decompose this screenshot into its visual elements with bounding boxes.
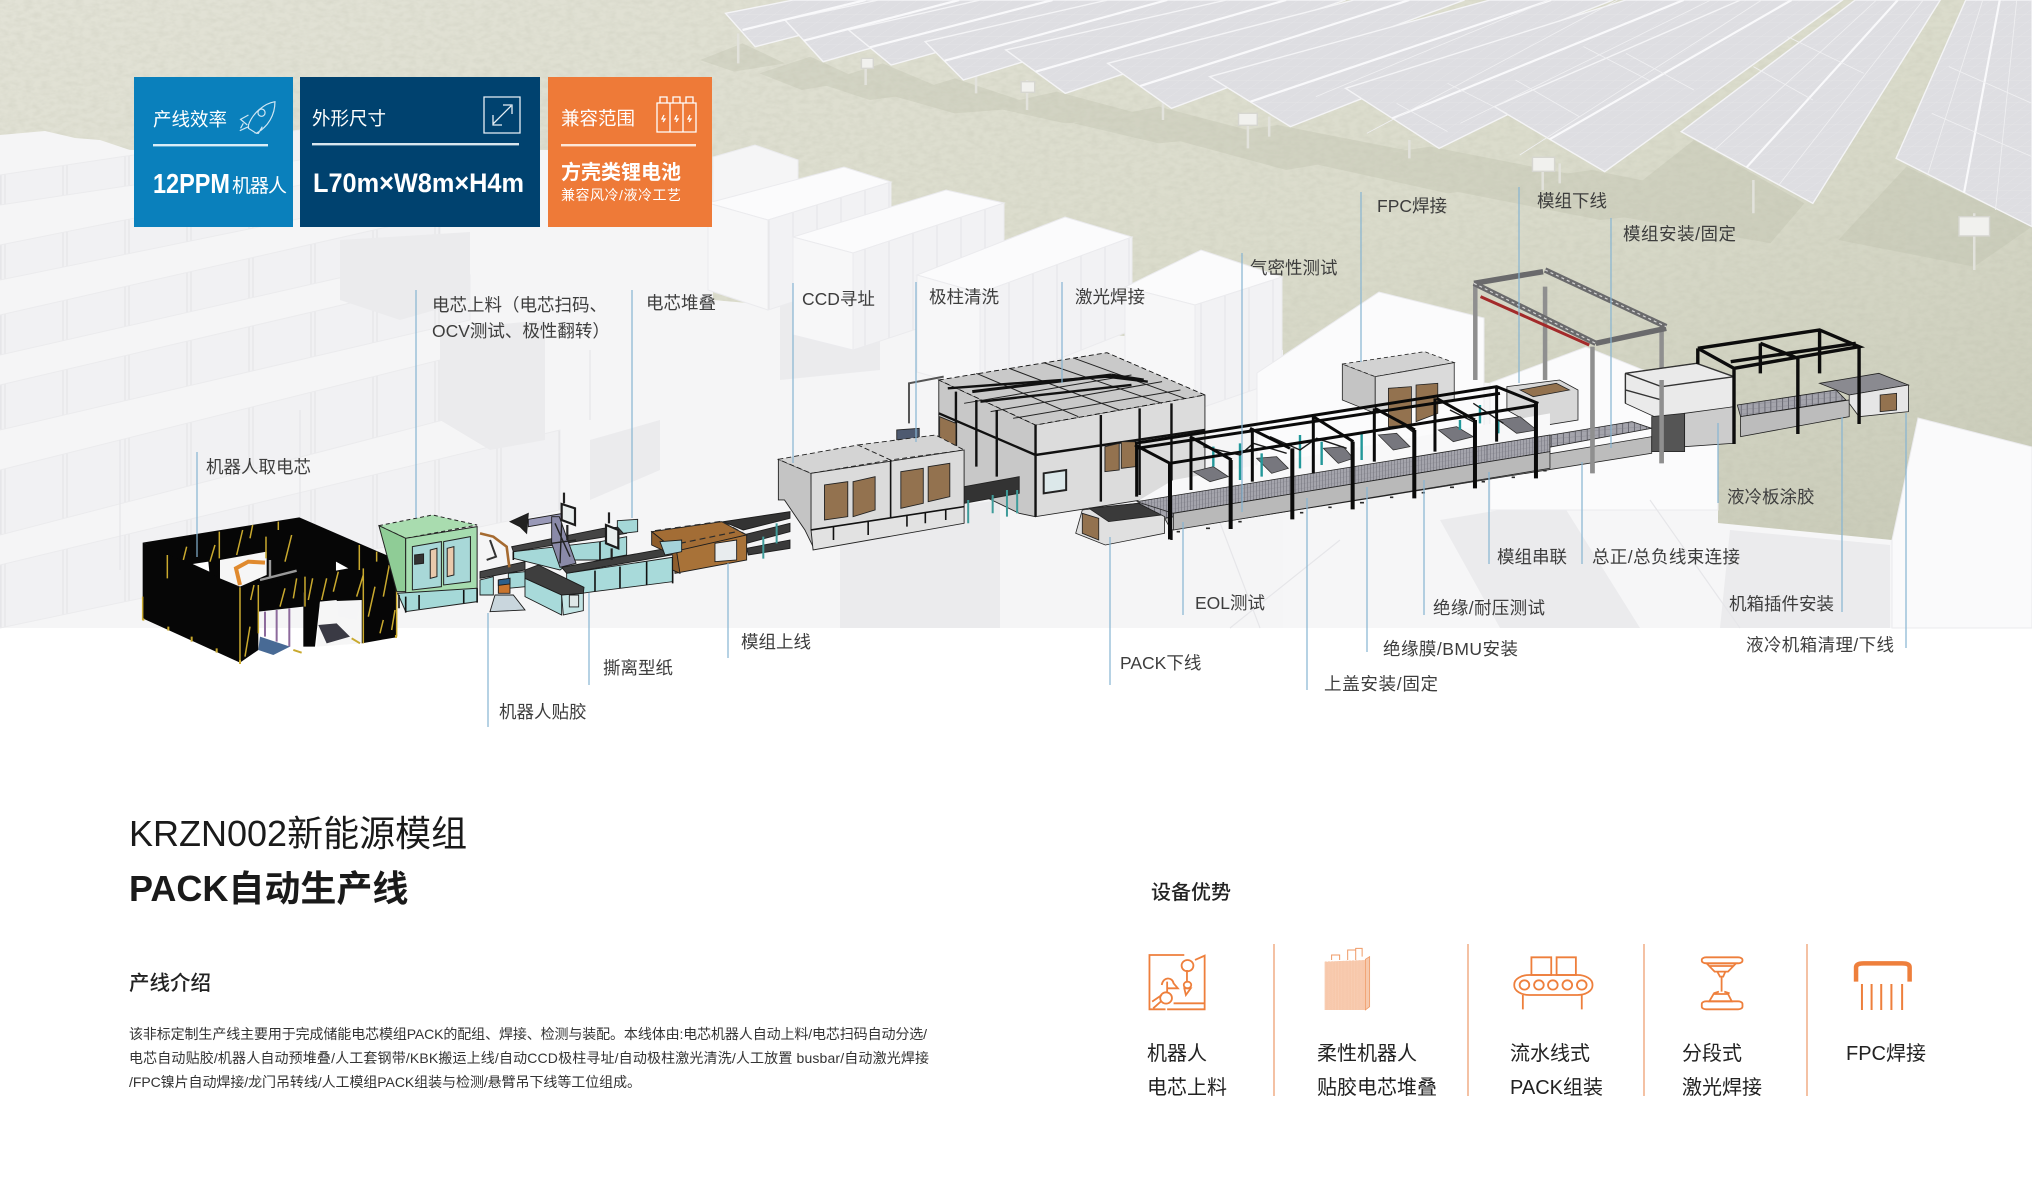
advantage: FPC welding: FPC焊接 bbox=[1846, 1042, 1926, 1065]
label: PACK下线: PACK下线 bbox=[1120, 653, 1201, 673]
stat box: line efficiency bbox=[134, 77, 293, 227]
label: 机器人取电芯: 机器人取电芯 bbox=[206, 457, 311, 477]
label: 电芯上料 bbox=[416, 290, 610, 518]
FPC cabinet, gantry and right-hand stations bbox=[1076, 270, 1908, 545]
green loading cabinet bbox=[379, 515, 477, 613]
label: 模组串联: 模组串联 bbox=[1497, 547, 1567, 567]
advantage: flexible robot: 柔性机器人 bbox=[1317, 1042, 1417, 1065]
hero background: solar farm and containers bbox=[0, 0, 2032, 628]
advantage: conveyor assembly: PACK组装 bbox=[1510, 1076, 1603, 1099]
label: 模组上线 bbox=[728, 563, 811, 658]
stat box: outer dimensions: L70m×W8m×H4m bbox=[313, 168, 524, 198]
icon: battery cells bbox=[657, 97, 696, 132]
label: 极柱清洗: 极柱清洗 bbox=[929, 287, 999, 307]
icon: rocket bbox=[240, 102, 275, 133]
advantage: conveyor assembly bbox=[1510, 957, 1603, 1099]
label: 上盖安装/固定: 上盖安装/固定 bbox=[1324, 674, 1438, 694]
label: 液冷机箱清理/下线: 液冷机箱清理/下线 bbox=[1746, 635, 1894, 655]
label: EOL测试 bbox=[1183, 522, 1265, 615]
grey cabinets and laser enclosure bbox=[778, 353, 1205, 550]
label: 激光焊接 bbox=[1062, 282, 1145, 383]
paragraph bbox=[129, 1026, 929, 1090]
robot fence cell bbox=[143, 517, 398, 664]
advantage: robot cell loading bbox=[1147, 955, 1227, 1099]
stat box: line efficiency: 12PPM bbox=[153, 168, 230, 199]
label: 气密性测试: 气密性测试 bbox=[1250, 258, 1338, 278]
stat box: line efficiency: 机器人 bbox=[232, 175, 287, 197]
heading: advantages: 设备优势 bbox=[1151, 881, 1231, 904]
production line equipment bbox=[143, 270, 1908, 664]
label: 绝缘膜/BMU安装: 绝缘膜/BMU安装 bbox=[1383, 639, 1518, 659]
label: 模组串联 bbox=[1489, 472, 1567, 567]
label: FPC焊接: FPC焊接 bbox=[1377, 196, 1447, 216]
title: PACK自动生产线 bbox=[129, 868, 408, 909]
near containers bbox=[708, 145, 2032, 628]
stat box: compatibility: 方壳类锂电池 bbox=[561, 160, 681, 184]
paragraph: /FPC镍片自动焊接/龙门吊转线/人工模组PACK组装与检测/悬臂吊下线等工位组成。 bbox=[129, 1074, 641, 1090]
far container faces bbox=[0, 130, 560, 628]
label: 模组上线: 模组上线 bbox=[741, 632, 811, 652]
advantage: robot cell loading: 电芯上料 bbox=[1147, 1076, 1227, 1099]
title: KRZN002新能源模组 bbox=[129, 813, 467, 854]
heading: line introduction: 产线介绍 bbox=[129, 972, 211, 995]
title bbox=[129, 813, 467, 909]
advantage: segmented welding: 激光焊接 bbox=[1682, 1076, 1762, 1099]
advantage: flexible robot bbox=[1317, 948, 1437, 1099]
label: 电芯上料: 电芯上料（电芯扫码、 bbox=[432, 295, 607, 315]
stat box: compatibility: 兼容范围 bbox=[561, 108, 635, 129]
label: 机箱插件安装: 机箱插件安装 bbox=[1729, 594, 1834, 614]
label: 撕离型纸: 撕离型纸 bbox=[603, 658, 673, 678]
label: 机器人取电芯 bbox=[197, 452, 311, 557]
label: 机器人贴胶 bbox=[488, 613, 586, 727]
label: 电芯堆叠: 电芯堆叠 bbox=[646, 293, 716, 313]
icon: robot arms bbox=[1149, 955, 1205, 1009]
label: 绝缘/耐压测试: 绝缘/耐压测试 bbox=[1433, 598, 1545, 618]
equipment advantages bbox=[1147, 881, 1926, 1099]
advantage: segmented welding: 分段式 bbox=[1682, 1042, 1742, 1065]
process labels bbox=[197, 187, 1906, 727]
stat box: outer dimensions: 外形尺寸 bbox=[312, 108, 386, 129]
label: 电芯上料: OCV测试、极性翻转） bbox=[432, 321, 610, 341]
label: CCD寻址: CCD寻址 bbox=[802, 289, 875, 309]
stat box: compatibility bbox=[548, 77, 712, 227]
stat box: line efficiency: 产线效率 bbox=[153, 109, 227, 130]
advantage: FPC welding bbox=[1846, 963, 1926, 1065]
label: 撕离型纸 bbox=[589, 593, 673, 685]
label: 总正/总负线束连接: 总正/总负线束连接 bbox=[1592, 547, 1740, 567]
icon: conveyor bbox=[1514, 957, 1592, 1009]
paragraph: 电芯自动贴胶/机器人自动预堆叠/人工套钢带/KBK搬运上线/自动CCD极柱寻址/自动极柱激光清洗/人工放置 busbar/自动激光焊接 bbox=[129, 1050, 929, 1066]
advantage: segmented welding bbox=[1682, 957, 1762, 1099]
advantage: flexible robot: 贴胶电芯堆叠 bbox=[1317, 1076, 1437, 1099]
icon: FPC comb bbox=[1856, 963, 1910, 1010]
label: EOL测试: EOL测试 bbox=[1195, 593, 1265, 613]
label: 激光焊接: 激光焊接 bbox=[1075, 287, 1145, 307]
container base bbox=[0, 131, 1283, 628]
line introduction bbox=[129, 972, 929, 1090]
long assembly conveyor with overhead frames bbox=[1135, 387, 1550, 539]
advantage: robot cell loading: 机器人 bbox=[1147, 1042, 1207, 1065]
advantage: conveyor assembly: 流水线式 bbox=[1510, 1042, 1590, 1065]
icon: resize arrows bbox=[484, 97, 520, 133]
label: 模组安装/固定: 模组安装/固定 bbox=[1623, 224, 1736, 244]
label: 液冷板涂胶: 液冷板涂胶 bbox=[1727, 487, 1814, 507]
label: 绝缘/耐压测试 bbox=[1424, 480, 1545, 618]
label: 模组下线: 模组下线 bbox=[1537, 191, 1607, 211]
shadows between containers bbox=[340, 232, 1890, 628]
icon: laser welder bbox=[1702, 957, 1742, 1009]
robot stacking station and brown loader bbox=[480, 493, 790, 615]
label: 机器人贴胶: 机器人贴胶 bbox=[499, 702, 586, 722]
solar panel rows bbox=[700, 0, 2032, 270]
paragraph: 该非标定制生产线主要用于完成储能电芯模组PACK的配组、焊接、检测与装配。本线体由:电芯机器人自动上料/电芯扫码自动分选/ bbox=[129, 1026, 927, 1042]
icon: stacked cells bbox=[1325, 948, 1370, 1010]
label: 液冷板涂胶 bbox=[1718, 423, 1814, 507]
stat box: compatibility: 兼容风冷/液冷工艺 bbox=[561, 187, 681, 203]
stat box: outer dimensions bbox=[300, 77, 540, 227]
